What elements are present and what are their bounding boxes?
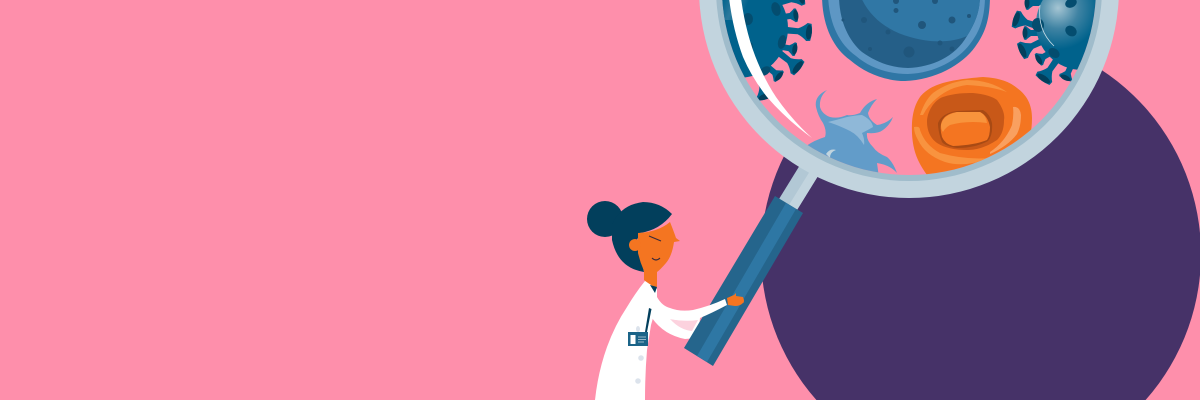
amoeba cell: [808, 90, 897, 173]
collar detail: [650, 285, 657, 293]
glass highlight: [729, 0, 812, 138]
red blood cell: [912, 77, 1032, 174]
coat buttons: [635, 355, 644, 384]
lab coat: [595, 281, 727, 400]
eye and smile: [649, 236, 661, 260]
lens inner edge: [716, 0, 1102, 181]
purple circle: [761, 34, 1200, 400]
illustration: [587, 0, 1200, 400]
head and neck: [638, 222, 680, 287]
virus left: [722, 0, 812, 101]
scientist: [587, 201, 744, 400]
lens view: [722, 0, 1096, 175]
hand: [727, 293, 744, 306]
hair back: [612, 202, 672, 272]
handle: [684, 196, 803, 366]
scientist lower arm: [652, 318, 700, 339]
ear: [629, 239, 641, 251]
ID badge: [628, 326, 648, 346]
blue cell: [822, 0, 990, 81]
lens ring: [699, 0, 1119, 198]
virus right: [1012, 0, 1096, 85]
lanyard: [645, 308, 652, 332]
glass neck: [779, 165, 818, 210]
magnifying glass: [684, 0, 1128, 366]
hair bun: [587, 201, 623, 237]
